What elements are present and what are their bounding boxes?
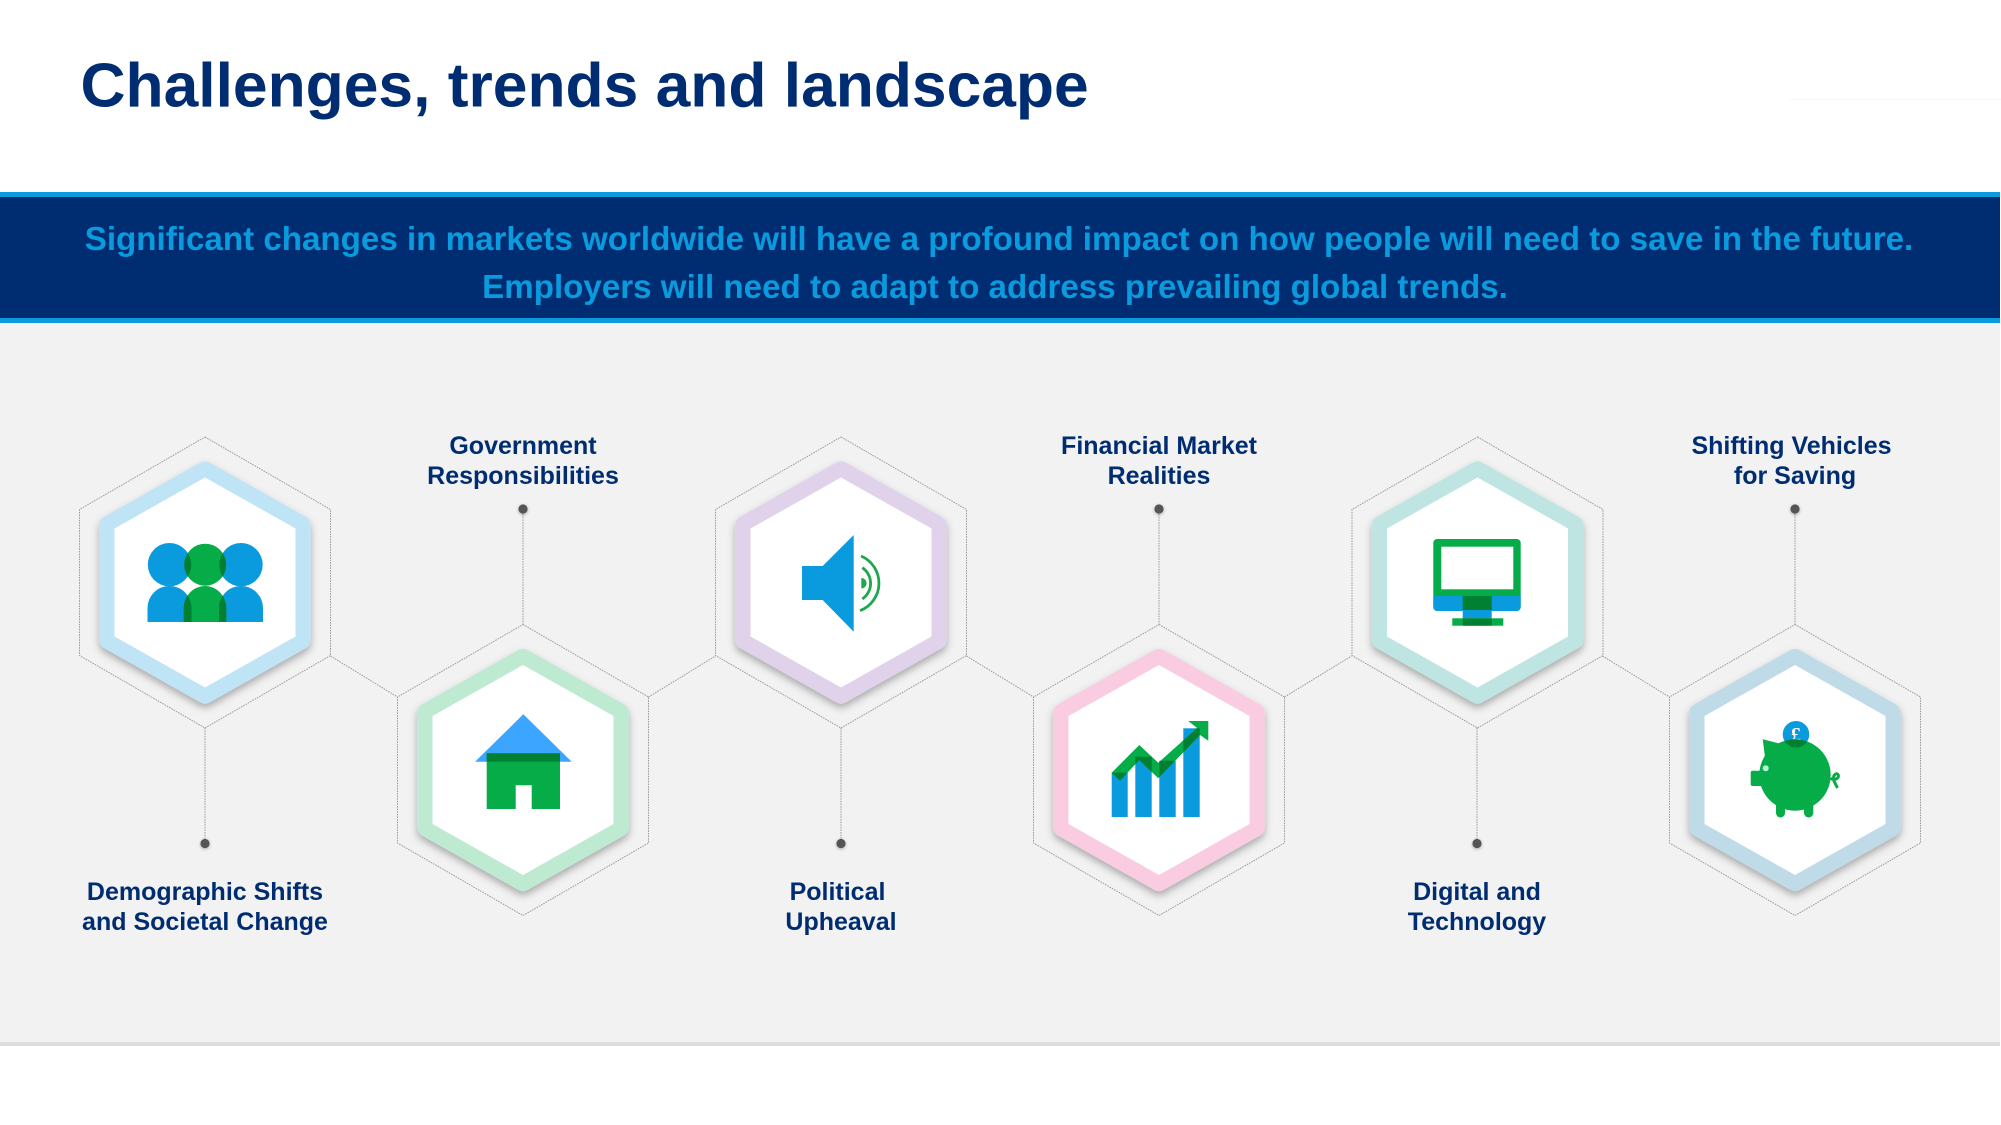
icon: rising bar chart (1112, 721, 1208, 817)
page header: title: Challenges, trends and landscape (80, 52, 1089, 120)
connector dot (1472, 839, 1482, 848)
label: Demographic Shifts (87, 878, 323, 906)
item 3: political upheaval (716, 437, 966, 936)
hexagon: blue (80, 437, 330, 728)
item 5: digital and technology (1352, 437, 1603, 936)
connector lines between hexagons (205, 509, 1795, 843)
label: and Societal Change (82, 908, 328, 936)
label: Responsibilities (427, 462, 619, 490)
banner text line 2: Employers will need to adapt to address prevailing global trends. (482, 269, 1508, 306)
label: Realities (1108, 462, 1210, 490)
label: Upheaval (785, 908, 897, 936)
connector dot (200, 839, 210, 848)
label: Government (449, 432, 597, 460)
banner text line 1: Significant changes in markets worldwide will have a profound impact on how people will need to save in the future. (85, 221, 1913, 258)
connector dot (518, 504, 528, 514)
panel: diagram background (0, 323, 2000, 1042)
icon: monitor (1433, 539, 1521, 626)
icon: people (148, 543, 263, 622)
icon: speaker (802, 535, 879, 632)
item 2: government responsibilities (398, 432, 648, 916)
label: Digital and (1413, 878, 1541, 906)
faint header rule (1790, 99, 2001, 100)
connector dot (836, 839, 846, 848)
icon: piggy bank (1751, 721, 1839, 818)
icon: house (475, 714, 572, 809)
icon: piggy bank: £ (1791, 724, 1801, 746)
hexagon: green (398, 624, 648, 916)
label: Financial Market (1061, 432, 1258, 460)
label: for Saving (1734, 462, 1856, 490)
footer rule (0, 1042, 2000, 1046)
item 1: demographic shifts (80, 437, 330, 936)
label: Political (790, 878, 885, 906)
hexagon: purple (716, 437, 966, 728)
item 6: shifting vehicles for saving (1670, 432, 1920, 916)
label: Shifting Vehicles (1691, 432, 1892, 460)
label: Technology (1408, 908, 1546, 936)
hexagon: grey blue (1670, 624, 1920, 916)
banner (0, 192, 2000, 323)
connector dot (1154, 504, 1164, 514)
hexagon: teal (1352, 437, 1603, 728)
item 4: financial market realities (1034, 432, 1284, 916)
connector dot (1790, 504, 1800, 514)
hexagon: pink (1034, 624, 1284, 916)
